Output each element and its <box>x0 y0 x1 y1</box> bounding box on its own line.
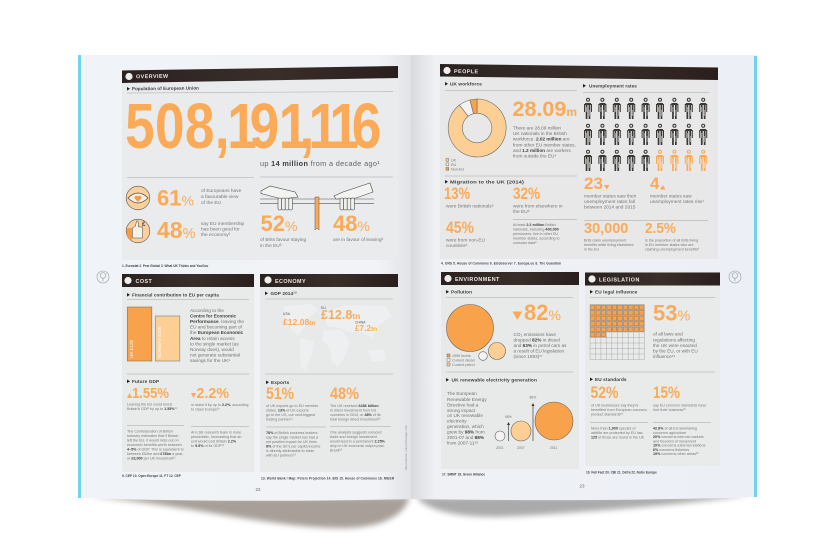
stat: 2.5 percent: is the proportion of all Brits living <box>645 238 698 242</box>
text: CEP paragraph: savings for the UK⁹ <box>190 358 230 363</box>
text: CO2 <box>514 332 567 359</box>
big population number: 508 <box>125 91 214 162</box>
stat: 4 up: member states saw <box>650 194 692 200</box>
GDP: China: £7.2tn <box>355 324 377 333</box>
text: output analysis: One analysis suggests reduced <box>330 430 381 434</box>
heading: GDP 2014: GDP 2014¹³ <box>270 291 297 296</box>
text: workforce paragraph: There are 28.09 million <box>513 126 561 130</box>
stat: 51 percent: 51% <box>266 384 294 403</box>
stat: 48 percent leave: are in favour of leaving³ <box>333 237 384 243</box>
text: CBI estimate: left the EU, it would miss out on <box>127 438 179 442</box>
text: Britons abroad: At least 2.2 million British <box>513 223 556 227</box>
big population number: 191 <box>227 91 308 162</box>
bubble chart: renewable growth: 98% <box>505 415 512 419</box>
bubble chart: renewable growth: 2001 <box>496 446 504 450</box>
heading: population <box>127 86 393 93</box>
stat: 48 percent investment: 48% <box>330 384 359 403</box>
bubble legend <box>447 354 475 367</box>
stat: 30,000: 30,000 <box>584 221 628 237</box>
text: renewable paragraph: generation, which <box>447 424 484 429</box>
icon: thumbs up with pound: £ <box>142 222 146 228</box>
text: CEP paragraph: EU and becoming part of <box>190 325 243 330</box>
heading: financial contribution <box>127 292 249 300</box>
text: CEP paragraph: According to the <box>190 308 224 313</box>
footnote: people: 4. ONS 5. House of Commons 6. EUobserver 7. Europa.eu 8. The Guardian <box>441 262 561 266</box>
stat: 48 percent investment <box>330 384 381 422</box>
stat: 48 percent investment: countries in 2014, or 48% of its <box>330 413 381 417</box>
text: output analysis: would lead to a permanent 2.25% <box>330 440 386 444</box>
text: LSE estimate: An LSE research team is more <box>191 430 241 434</box>
stat: 61 percent <box>157 186 242 210</box>
stat: 48 percent investment: The UK received £486 billion <box>330 404 379 408</box>
text: CO2: dropped 82% in diesel <box>514 338 560 342</box>
bubble chart: renewable growth: 2011 <box>550 446 557 450</box>
stat: 52 percent <box>590 383 647 416</box>
stat: 51 percent: trading partner¹⁴ <box>266 418 293 422</box>
stat: 48 percent: the economy² <box>201 232 230 238</box>
stat: 30,000: in the EU <box>584 248 600 252</box>
stat: 13 percent: 13% <box>444 184 470 203</box>
stat: 52 percent stay: 52% <box>260 211 297 236</box>
text: LSE estimate: pessimistic, forecasting that an <box>191 435 241 439</box>
bubble legend: Current diesel <box>452 358 475 362</box>
stat: 51 percent: go to the US, our next-biggest <box>266 413 315 417</box>
stat: 45 percent <box>446 218 485 249</box>
stat: 30,000: benefits while living elsewhere <box>584 243 634 247</box>
heading: UK workforce: UK workforce <box>450 82 482 86</box>
text: CBI estimate <box>127 430 184 460</box>
text: renewable paragraph: strong impact <box>447 408 476 413</box>
panel: environment <box>441 272 579 469</box>
illustration credit: Illustrations: Harry/Change.com <box>404 424 408 470</box>
magazine shadow: left page <box>88 497 410 528</box>
heading: EU standards: EU standards <box>595 377 627 382</box>
economy header bar: ECONOMY <box>275 279 306 285</box>
text: business leaders <box>266 431 320 457</box>
text: lawmaking breakdown: 19% concerns other areas²² <box>653 452 699 456</box>
text: output analysis <box>330 430 386 452</box>
donut legend <box>446 158 464 172</box>
stat: 4 up <box>650 174 705 205</box>
stat: 53 percent: of all laws and <box>653 332 683 336</box>
donut legend: UK <box>451 158 457 162</box>
legislation header bar: LEGISLATION <box>599 278 640 284</box>
stat: 30,000 <box>584 221 634 252</box>
panel: cost <box>122 274 254 472</box>
environment header bar: ENVIRONMENT <box>455 277 500 283</box>
heading: population: Population of European Union <box>132 86 199 91</box>
bar chart: contribution per capita: UK £128 <box>129 340 134 358</box>
stat: 53 percent: 53% <box>653 301 690 326</box>
stat: 48 percent leave <box>333 211 384 243</box>
GDP: EU: EU <box>321 306 326 310</box>
heading: legal influence <box>590 290 715 298</box>
text: workforce paragraph: from other EU member states, <box>513 142 576 147</box>
footnote: overview: 1. Eurostat 2. Pew Global 3. What UK Thinks and YouGov <box>122 264 209 268</box>
text: renewable paragraph: 2001-07 and 88% <box>447 435 485 440</box>
stat: 2.5 percent: in EU member states who are <box>645 243 694 247</box>
text: renewable paragraph <box>447 391 487 445</box>
bubble legend: Current petrol <box>452 363 475 367</box>
text: business leaders: say the single market has had a <box>266 435 319 439</box>
stat: 51 percent: of UK exports go to EU member <box>266 404 319 408</box>
stat: 32 percent: the EU⁵ <box>513 209 530 215</box>
illustration: tug of war rope <box>260 183 374 230</box>
text: lawmaking breakdown: concerns agriculture <box>653 431 686 435</box>
heading: renewable: UK renewable electricity generation <box>452 378 537 382</box>
heading: GDP 2014 <box>265 291 393 299</box>
people header bar <box>440 64 718 80</box>
text: CEP paragraph <box>190 308 244 363</box>
stat: 51 percent: states. 13% of UK exports <box>266 408 309 412</box>
stat: down 82 percent: 82% <box>524 300 561 325</box>
stat: plus 1.55 percent <box>127 385 178 411</box>
stat: 52 percent: 52% <box>590 383 618 402</box>
big population number: , <box>299 91 314 162</box>
stat: 53 percent <box>653 301 698 359</box>
stat: 48 percent investment: in direct investment from EU <box>330 408 377 412</box>
page number 23: 23 <box>580 484 585 488</box>
donut legend: Non-EU <box>451 168 464 172</box>
stat: 4 up: 4 <box>650 174 660 193</box>
stat: 13 percent: were British nationals⁵ <box>446 204 494 210</box>
donut legend: EU <box>451 163 456 167</box>
footnote: environment: 17. SMMT 18. Green Alliance <box>442 472 485 476</box>
text: CEP paragraph: to the single market (as <box>190 341 239 346</box>
icon: eye with heart <box>126 186 150 210</box>
stat: 52 percent: of UK businesses say they're <box>591 404 638 408</box>
stat: 48 percent <box>157 217 245 243</box>
stat: plus 1.55 percent: Britain's GDP by up to 1.55%¹⁰ <box>127 407 178 411</box>
legislation header bar <box>585 272 720 286</box>
stat: 53 percent: by the EU, or with EU <box>653 349 698 354</box>
stat: 45 percent: countries⁵ <box>446 243 467 249</box>
stat: 61 percent: a favourable view <box>201 194 239 200</box>
text: CO2: (since 1993)¹⁷ <box>514 354 543 359</box>
text: workforce paragraph: and 1.2 million are workers <box>513 148 572 153</box>
GDP: USA: £12.08tn <box>283 317 315 327</box>
panel: people <box>440 64 718 259</box>
stat: 23 down: 23 <box>584 174 603 193</box>
text: output analysis: Brexit¹⁶ <box>330 448 343 452</box>
stat: 2.5 percent: claiming unemployment benefits⁸ <box>645 248 700 252</box>
GDP: USA <box>283 312 315 327</box>
panel: overview <box>122 66 398 260</box>
stat: 48 percent investment: total foreign direct investment¹⁵ <box>330 418 381 422</box>
heading: future GDP: Future GDP <box>132 379 159 384</box>
stat: 15 percent: say EU common standards have <box>653 404 706 408</box>
text: LSE estimate <box>191 430 241 448</box>
text: lawmaking breakdown: and freedom of movement <box>653 439 696 443</box>
pictogram: member states <box>584 98 707 171</box>
bubble chart: pollution <box>446 304 506 360</box>
heading: unemployment: Unemployment rates <box>589 84 637 88</box>
text: lawmaking breakdown: 10% concerns external relations <box>653 444 706 448</box>
stat: 32 percent: 32% <box>513 184 540 203</box>
stat: 52 percent stay: of Brits favour staying <box>260 237 306 243</box>
bubble chart: renewable growth <box>495 396 573 450</box>
cost header bar <box>122 274 254 287</box>
left page <box>78 55 411 501</box>
text: renewable paragraph: Directive had a <box>447 402 479 407</box>
stat: 15 percent <box>653 383 706 412</box>
overview header bar <box>122 66 398 83</box>
text: lawmaking breakdown: 6% concerns fisheries <box>653 448 689 452</box>
stat: 52 percent: benefited from European common <box>591 408 647 412</box>
text: CBI estimate: 4–5% of GDP. This is equivalent to <box>127 448 184 452</box>
stat: 30,000: Brits claim unemployment <box>584 238 626 242</box>
text: lawmaking breakdown <box>653 426 706 456</box>
stat: 48 percent: say EU membership <box>201 221 245 227</box>
waffle chart: 53 of 100 <box>590 304 644 360</box>
cost header bar: COST <box>136 279 153 285</box>
text: business leaders: with EU partners¹⁶ <box>266 453 296 457</box>
stat: 15 percent: 15% <box>653 383 680 402</box>
stat: 61 percent: 61% <box>157 186 194 210</box>
bubble legend: 1990 levels <box>452 354 471 358</box>
heading: UK workforce <box>445 82 577 90</box>
stat: 48 percent leave: 48% <box>333 211 370 236</box>
population subtitle: up 14 million from a decade ago¹ <box>260 159 380 168</box>
stat: 23 down: unemployment rates fall <box>584 199 635 205</box>
footnote: economy: 13. World Bank / Map: Peters Projection 14. BIS 15. House of Commons 16. NIESR <box>261 476 395 480</box>
footnote: legislation: 19. Full Fact 20. CBI 21. Defra 22. Notre Europe <box>586 470 657 474</box>
text: renewable paragraph: grew by 98% from <box>447 430 485 434</box>
text: species <box>591 426 645 440</box>
heading: exports: Exports <box>271 380 290 385</box>
stat: 13 percent <box>444 184 494 210</box>
stat: 61 percent: of Europeans have <box>201 188 242 194</box>
cover edge: right <box>754 56 757 497</box>
stat: minus 2.2 percent: to Open Europe¹⁰ <box>191 408 220 412</box>
stat: 15 percent: hurt their business²⁰ <box>653 408 686 412</box>
big population number: , <box>215 91 230 162</box>
stat: 61 percent: of the EU <box>201 200 222 206</box>
page number 22: 22 <box>256 487 261 492</box>
people header bar: PEOPLE <box>454 69 479 75</box>
heading: legal influence: EU legal influence <box>595 290 638 294</box>
heading: migration: Migration to the UK (2014) <box>450 180 524 184</box>
text: CBI estimate: economic benefits worth between <box>127 443 182 447</box>
stat: 23 down: member states saw their <box>584 194 637 200</box>
text: business leaders: 8% of the UK's per capita income <box>266 444 320 448</box>
world map <box>283 304 392 370</box>
text: CBI estimate: between £62bn and £78bn a year, <box>127 452 183 456</box>
panel: economy <box>260 274 398 472</box>
text: renewable paragraph: electricity <box>447 418 467 424</box>
GDP: China: CHINA <box>355 320 366 324</box>
stat: 32 percent: were from elsewhere in <box>513 204 563 210</box>
donut chart: workforce <box>448 99 506 157</box>
text: Britons abroad: consular data⁶ <box>513 241 537 245</box>
text: species: More than 1,000 species of <box>591 426 636 430</box>
text: CBI estimate: or £3,000 per UK household¹¹ <box>127 456 176 460</box>
text: renewable paragraph: on UK renewable <box>447 413 483 418</box>
panel: legislation <box>585 272 720 466</box>
text: lawmaking breakdown: 20% concerns internal markets <box>653 435 704 439</box>
text: CO2: CO₂ emissions have <box>514 332 556 337</box>
stat: 2.5 percent: 2.5% <box>645 221 676 237</box>
text: business leaders: net positive impact for UK firms <box>266 440 317 444</box>
text: CEP paragraph: the European Economic <box>190 330 244 335</box>
stat: plus 1.55 percent: Leaving the EU could boost <box>127 402 172 406</box>
stat: plus 1.55 percent: 1.55% <box>132 385 169 402</box>
stat: 28.09m: 28.09m <box>512 97 577 121</box>
stat: 48 percent: 48% <box>157 217 196 243</box>
text: business leaders: 78% of British business leaders <box>266 431 318 435</box>
text: CBI estimate: Industry estimates that if Britain <box>127 434 178 438</box>
text: Britons abroad: member states, according to <box>513 236 560 240</box>
text: CEP paragraph: Centre for Economic <box>190 314 236 318</box>
GDP: EU: £12.8tn <box>321 308 360 322</box>
stat: 32 percent <box>513 184 563 215</box>
text: Britons abroad: pensioners, live in other EU <box>513 232 558 236</box>
icon: left page logo <box>97 271 109 283</box>
text: CEP paragraph: Norway does), would <box>190 347 234 352</box>
text: renewable paragraph: from 2007-11¹⁸ <box>447 440 478 445</box>
text: business leaders: is directly attributable to trade <box>266 449 314 453</box>
text: LSE estimate: to 9.5% of its GDP¹² <box>191 444 225 448</box>
magazine shadow: right page <box>416 495 750 517</box>
text: workforce paragraph <box>513 126 576 158</box>
stat: 23 down <box>584 174 637 210</box>
text: output analysis: drop in UK economic output post- <box>330 444 385 448</box>
stat: minus 2.2 percent <box>191 385 248 412</box>
stat: 52 percent: product standards²⁰ <box>591 412 624 416</box>
cover edge: left <box>78 55 81 498</box>
icon: thumbs up with pound <box>126 219 150 243</box>
right page <box>411 55 757 500</box>
stat: 2.5 percent <box>645 221 700 252</box>
text: workforce paragraph: workforce. 2.02 million are <box>513 136 570 142</box>
economy header bar <box>260 274 398 287</box>
stat: 45 percent: 45% <box>446 218 474 237</box>
footnote: cost: 9. CEP 10. Open Europe 11. FT 12. CEP <box>122 474 182 478</box>
text: workforce paragraph: from outside the EU⁴ <box>513 154 556 158</box>
bar chart: contribution per capita: NORWAY £106 <box>157 326 162 358</box>
heading: pollution: Pollution <box>451 290 472 294</box>
bubble chart: renewable growth: 2007 <box>517 446 525 450</box>
bubble chart: renewable growth: 88% <box>530 396 536 400</box>
stat: 52 percent stay: in the EU³ <box>260 243 282 249</box>
stat: 53 percent: the UK were enacted <box>653 343 697 348</box>
text: lawmaking breakdown: 42.8% of all EU lawmaking <box>653 426 697 430</box>
stat: 23 down: between 2014 and 2015 <box>584 204 636 210</box>
text: CBI estimate: The Confederation of British <box>127 430 173 434</box>
text: species: 125 of those are found in the UK <box>591 436 645 440</box>
big population number: 116 <box>309 91 381 162</box>
heading: pollution <box>446 290 573 298</box>
stat: minus 2.2 percent: or slash it by up to 2.2%, according <box>191 403 248 407</box>
text: CEP paragraph: not generate substantial <box>190 352 240 357</box>
text: Britons abroad <box>513 223 560 245</box>
environment header bar <box>441 272 579 285</box>
stat: 53 percent: regulations affecting <box>653 338 695 342</box>
icon: right page logo <box>729 271 741 283</box>
text: renewable paragraph: Renewable Energy <box>447 397 487 402</box>
heading: unemployment <box>583 84 709 92</box>
stat: 48 percent: has been good for <box>201 226 240 232</box>
text: Britons abroad: nationals, including 400,000 <box>513 228 559 232</box>
stat: minus 2.2 percent: 2.2% <box>196 385 229 402</box>
stat: 45 percent: were from non-EU <box>446 238 485 244</box>
stat: 53 percent: influence¹⁹ <box>653 354 675 359</box>
text: CO2: and 63% in petrol cars as <box>514 343 567 348</box>
stat: 51 percent <box>266 384 319 422</box>
text: LSE estimate: exit would cost Britain 2.2% <box>191 440 237 444</box>
GDP: USA: USA <box>283 312 291 316</box>
text: CEP paragraph: Performance, leaving the <box>190 319 244 324</box>
text: species: wildlife are protected by EU law, <box>591 431 643 435</box>
heading: financial contribution: Financial contribution to EU per capita <box>132 292 219 298</box>
text: CO2: a result of EU legislation <box>514 348 564 354</box>
text: renewable paragraph: The European <box>447 391 477 396</box>
bar chart: contribution per capita <box>127 307 180 361</box>
text: CEP paragraph: Area to retain access <box>190 336 235 341</box>
text: workforce paragraph: UK nationals in the British <box>513 131 567 136</box>
overview header bar: OVERVIEW <box>136 74 169 80</box>
stat: 4 up: unemployment rates rise⁷ <box>650 199 705 205</box>
stat: 52 percent stay <box>260 211 306 249</box>
text: output analysis: trade and foreign investment <box>330 435 377 439</box>
